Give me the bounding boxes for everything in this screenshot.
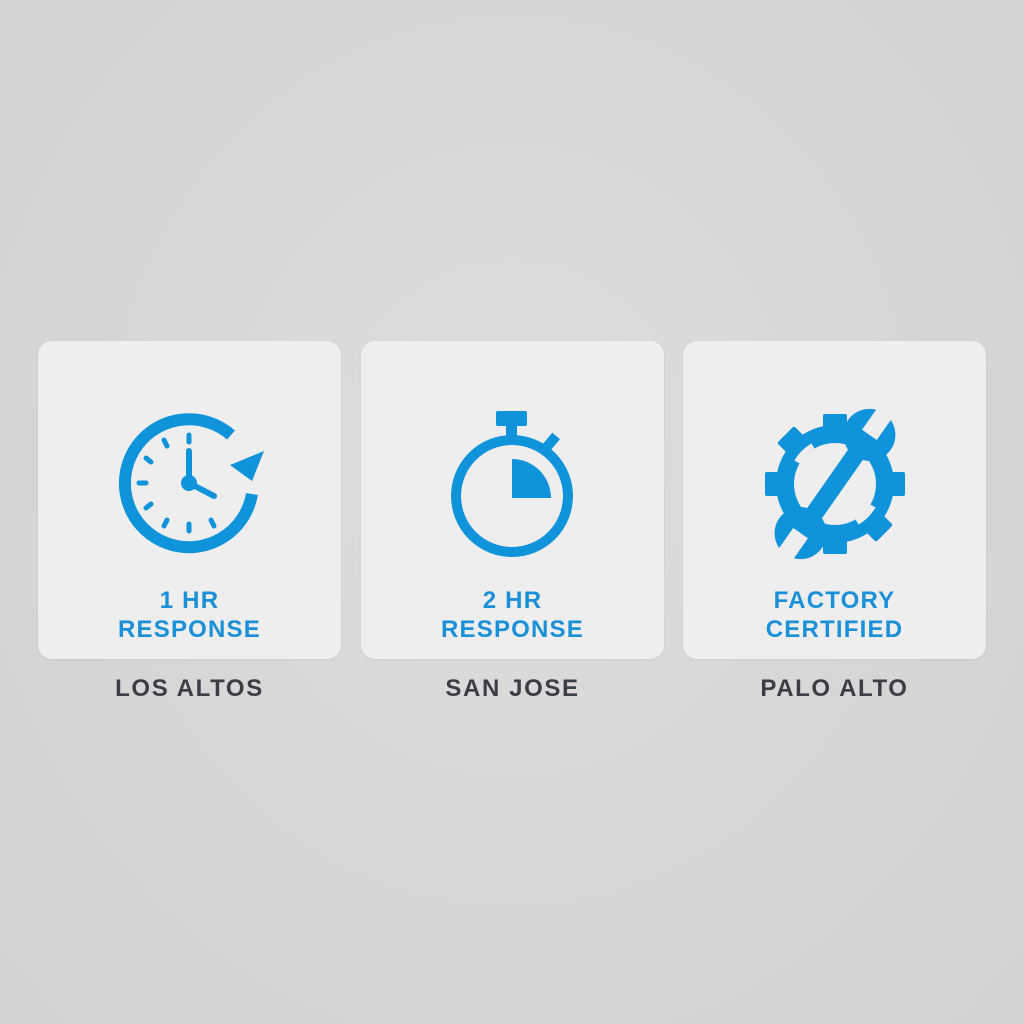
caption: 2 HR [483, 587, 542, 614]
label: San Jose: SAN JOSE [445, 675, 580, 702]
caption [441, 587, 584, 643]
caption: CERTIFIED [766, 616, 903, 643]
caption: FACTORY [774, 587, 895, 614]
caption: 1 HR [160, 587, 219, 614]
panel: Palo Alto [683, 341, 986, 659]
caption: RESPONSE [441, 616, 584, 643]
panel: San Jose [361, 341, 664, 659]
panel: Los Altos [38, 341, 341, 659]
caption: RESPONSE [118, 616, 261, 643]
caption [118, 587, 261, 643]
label: Palo Alto: PALO ALTO [760, 675, 909, 702]
icon: stopwatch [451, 411, 573, 557]
icon: clock with arrow [118, 413, 264, 554]
icon: gear and wrench [765, 408, 905, 560]
label: Los Altos: LOS ALTOS [115, 675, 264, 702]
caption [766, 587, 903, 643]
